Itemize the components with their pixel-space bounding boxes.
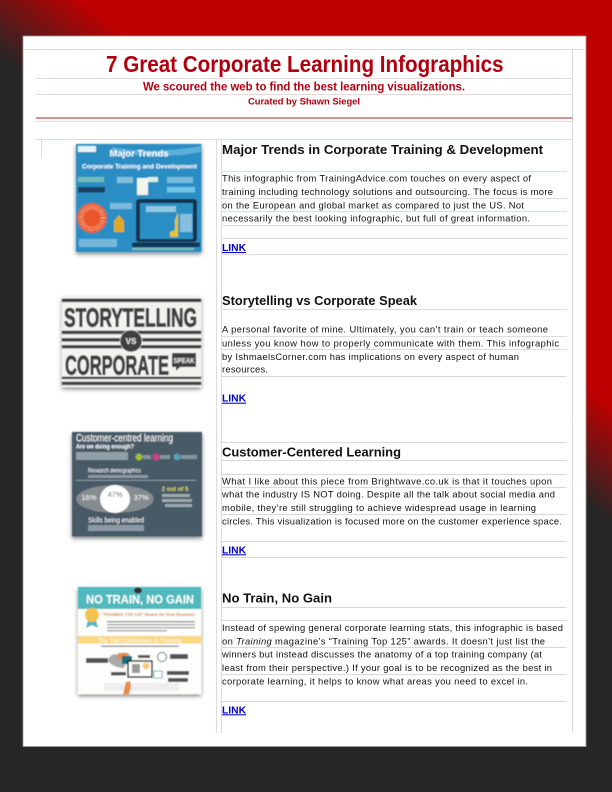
heading: Customer-Centered Learning	[222, 446, 401, 460]
thumbnail: customer-centred learning: Skills being enabled	[88, 518, 144, 525]
thumbnail: no train no gain: “TRAINING TOP 125” Means for Your Business	[101, 612, 195, 617]
thumbnail: customer-centred learning: Are we doing enough?	[76, 444, 134, 450]
thumbnail: major trends infographic: Major Trends	[109, 148, 169, 160]
description: what the industry IS NOT doing. Despite all the talk about social media and	[221, 489, 555, 500]
description: resources.	[222, 364, 268, 375]
description: Instead of spewing general corporate learning stats, this infographic is based	[222, 622, 563, 633]
link: LINK	[222, 704, 246, 716]
thumbnail: customer-centred learning: 47%	[107, 490, 123, 499]
thumbnail: storytelling vs corporate speak: CORPORATE	[65, 350, 169, 380]
description: training including technology solutions and outsourcing. The focus is more	[222, 186, 553, 197]
thumbnail: major trends infographic	[76, 144, 202, 252]
thumbnail: customer-centred learning: Customer-centred learning	[76, 433, 173, 445]
heading: Major Trends in Corporate Training & Development	[222, 143, 544, 157]
curator credit: Curated by Shawn Siegel	[248, 96, 360, 107]
description	[221, 622, 563, 686]
description: A personal favorite of mine. Ultimately, you can’t train or teach someone	[222, 324, 548, 335]
description	[222, 173, 553, 224]
heading: Storytelling vs Corporate Speak	[222, 294, 418, 308]
thumbnail: customer-centred learning	[72, 432, 202, 536]
panel: no train no gain	[78, 587, 567, 716]
thumbnail: storytelling vs corporate speak: VS	[126, 337, 137, 346]
link: LINK	[222, 242, 246, 254]
thumbnail: customer-centred learning: 2 out of 5	[162, 487, 189, 493]
thumbnail: customer-centred learning: 16%	[81, 493, 97, 502]
thumbnail: no train no gain: The Top Companies in Training	[98, 638, 182, 644]
thumbnail: major trends infographic: Corporate Training and Development	[82, 164, 198, 170]
panel: storytelling	[62, 294, 567, 405]
description: circles. This visualization is focused more on the customer experience space.	[222, 515, 562, 526]
header block	[106, 51, 504, 107]
description: What I like about this piece from Brightwave.co.uk is that it touches upon	[222, 475, 552, 486]
description: on the European and global market as compared to just the US. Not	[222, 199, 524, 210]
subtitle: We scoured the web to find the best learning visualizations.	[143, 81, 465, 94]
description: on Training magazine’s “Training Top 125” awards. It doesn’t just list the	[222, 635, 545, 646]
thumbnail: no train no gain	[78, 587, 201, 694]
thumbnail: storytelling vs corporate speak: STORYTELLING	[64, 303, 197, 333]
thumbnail: customer-centred learning: Research demographics	[88, 468, 142, 475]
description: by IshmaelsCorner.com has implications on every aspect of human	[222, 351, 519, 362]
thumbnail: storytelling vs corporate speak	[62, 296, 201, 387]
thumbnail: storytelling vs corporate speak: SPEAK	[174, 358, 194, 365]
description	[221, 475, 562, 526]
thumbnail: customer-centred learning: 37%	[133, 493, 149, 502]
description: least from their perspective.) If your goal is to be recognized as the best in	[222, 662, 552, 673]
title: 7 Great Corporate Learning Infographics	[106, 51, 504, 77]
description: mobile, they’re still struggling to achieve widespread usage in learning	[222, 502, 536, 513]
panel: customer-centered	[72, 432, 567, 558]
description: corporate learning, it helps to know what areas you need to excel in.	[222, 675, 528, 686]
link: LINK	[222, 544, 246, 556]
description	[222, 324, 559, 375]
description: necessarily the best looking infographic, but full of great information.	[222, 213, 530, 224]
heading: No Train, No Gain	[222, 591, 332, 605]
description: unless you know how to properly communicate with them. This infographic	[222, 338, 559, 349]
link: LINK	[222, 393, 246, 405]
description: winners but instead discusses the anatomy of a top training company (at	[221, 649, 542, 660]
description: This infographic from TrainingAdvice.com touches on every aspect of	[222, 173, 531, 184]
panel: major trends	[76, 143, 567, 254]
thumbnail: no train no gain: NO TRAIN, NO GAIN	[86, 592, 194, 606]
